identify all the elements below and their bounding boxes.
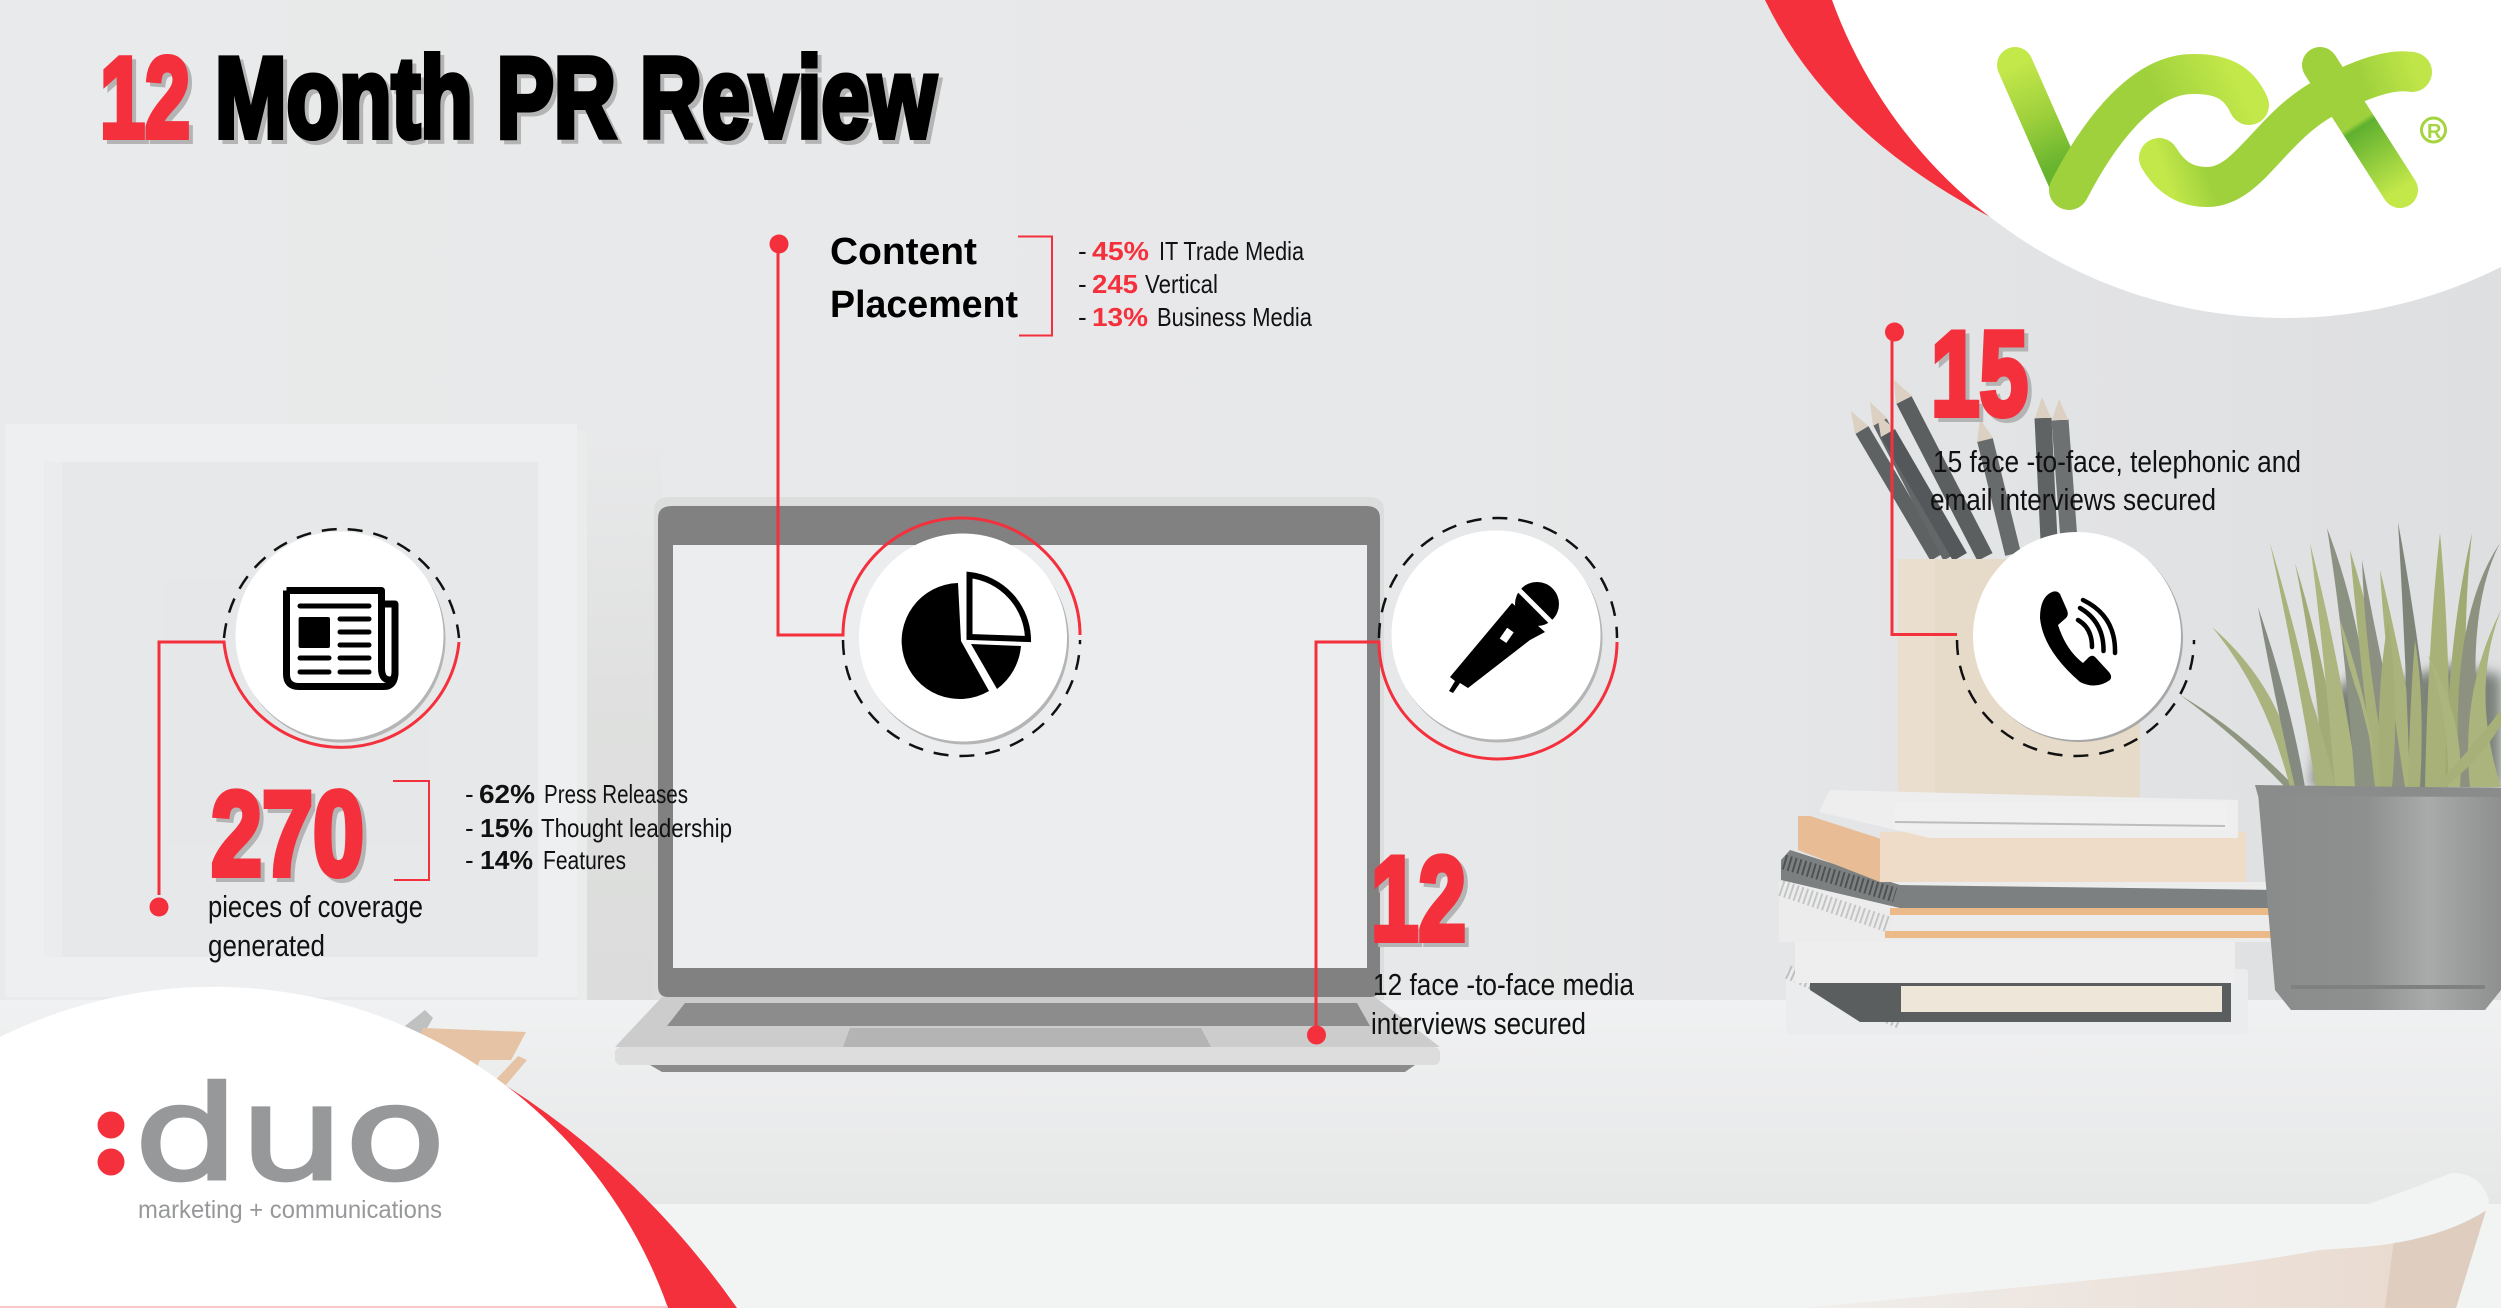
red ring bottom and connector <box>159 642 459 895</box>
registered mark <box>2422 118 2446 142</box>
registered R: R <box>2427 121 2442 143</box>
coverage list: 62% <box>479 779 535 809</box>
bottom-left white duo badge <box>0 987 737 1308</box>
coverage list: - <box>465 813 474 843</box>
interviews description: 12 face -to-face media <box>1373 967 1635 1002</box>
figure 270: 270 <box>211 767 364 901</box>
pencils <box>1851 380 2069 557</box>
wall shadow beside frame <box>587 440 662 1000</box>
coverage description: pieces of coverage <box>208 889 423 924</box>
figure 12: 12 <box>1371 832 1466 966</box>
duo colon dots <box>98 1112 124 1176</box>
white circle <box>236 532 444 740</box>
coverage description <box>208 889 423 963</box>
white quarter circle <box>1832 0 2501 318</box>
icon: pie chart <box>902 575 1028 699</box>
placement list: - <box>1078 302 1087 332</box>
white circle <box>0 987 668 1308</box>
icon: microphone <box>1449 582 1559 693</box>
connector dot <box>150 898 168 916</box>
red ring top and connector <box>778 250 1080 635</box>
coverage list: Thought leadership <box>541 813 732 843</box>
telephonic description <box>1930 444 2301 517</box>
connector dot <box>770 234 788 254</box>
picture frame <box>5 424 587 1000</box>
placement list: - <box>1078 236 1087 266</box>
figure 15: 15 <box>1931 307 2028 441</box>
heading: Content <box>830 231 977 273</box>
interviews description: interviews secured <box>1371 1006 1586 1041</box>
coverage list: Features <box>543 845 626 875</box>
book stack <box>1779 790 2285 1034</box>
book behind duo badge <box>400 1010 527 1100</box>
telephonic description: 15 face -to-face, telephonic and <box>1933 444 2301 479</box>
coverage description: generated <box>208 928 325 963</box>
red ring bottom and connector <box>1316 642 1617 1030</box>
icon: phone <box>2040 591 2115 686</box>
duo tagline: marketing + communications <box>138 1196 442 1224</box>
placement list: Vertical <box>1145 269 1218 299</box>
bottom pink line <box>0 1306 668 1308</box>
coverage list: Press Releases <box>544 779 688 809</box>
duo wordmark: duo <box>134 1058 446 1210</box>
icon: newspaper <box>286 590 395 686</box>
connector dot <box>1885 322 1904 342</box>
VOX logo <box>2015 65 2446 190</box>
white circle shadow <box>238 534 446 742</box>
coverage list: 15% <box>480 813 533 843</box>
dashed ring top <box>1379 518 1617 638</box>
dashed ring bottom <box>1957 640 2194 756</box>
panel: media interviews (microphone) <box>1307 518 1635 1044</box>
panel: telephonic interviews (phone) <box>1885 307 2301 756</box>
placement list: Business Media <box>1157 302 1312 332</box>
top-right white VOX badge <box>1765 0 2501 318</box>
chair back in foreground <box>1700 1173 2489 1308</box>
placement list <box>1078 236 1312 332</box>
white circle shadow <box>1975 534 2183 742</box>
panel: coverage (newspaper) <box>150 529 732 963</box>
connector dot <box>1307 1026 1326 1044</box>
wooden pencil holder <box>1898 559 2140 802</box>
white circle <box>1973 532 2181 740</box>
desk foreground <box>0 1204 2501 1308</box>
panel: content placement (pie chart) <box>770 231 1312 756</box>
placement list: 245 <box>1092 269 1138 299</box>
heading <box>830 231 1018 326</box>
white circle <box>859 534 1067 742</box>
coverage list <box>465 779 732 875</box>
title <box>100 35 936 162</box>
bracket <box>1018 236 1052 336</box>
placement list: IT Trade Media <box>1159 236 1304 266</box>
coverage list: 14% <box>480 845 533 875</box>
metal plant pot <box>2255 785 2501 1010</box>
red swoosh <box>450 1083 737 1308</box>
interviews description <box>1371 967 1635 1041</box>
white circle shadow <box>861 536 1069 744</box>
title number: 12 <box>100 35 190 162</box>
telephonic description: email interviews secured <box>1930 482 2216 517</box>
coverage list: - <box>465 845 474 875</box>
heading: Placement <box>830 284 1018 326</box>
white circle <box>1392 530 1600 740</box>
placement list: 45% <box>1092 236 1149 266</box>
placement list: 13% <box>1092 302 1148 332</box>
dashed ring top <box>224 529 459 638</box>
placement list: - <box>1078 269 1087 299</box>
title words: Month PR Review <box>215 35 936 162</box>
wall <box>0 0 2501 1000</box>
white circle shadow <box>1394 534 1602 742</box>
red connector <box>1892 335 1957 634</box>
plant <box>2180 522 2501 787</box>
laptop <box>615 497 1440 1072</box>
dashed ring bottom <box>843 640 1080 756</box>
coverage list: - <box>465 779 474 809</box>
bracket <box>393 781 429 880</box>
red swoosh <box>1765 0 2100 220</box>
desk surface <box>0 1000 2501 1207</box>
